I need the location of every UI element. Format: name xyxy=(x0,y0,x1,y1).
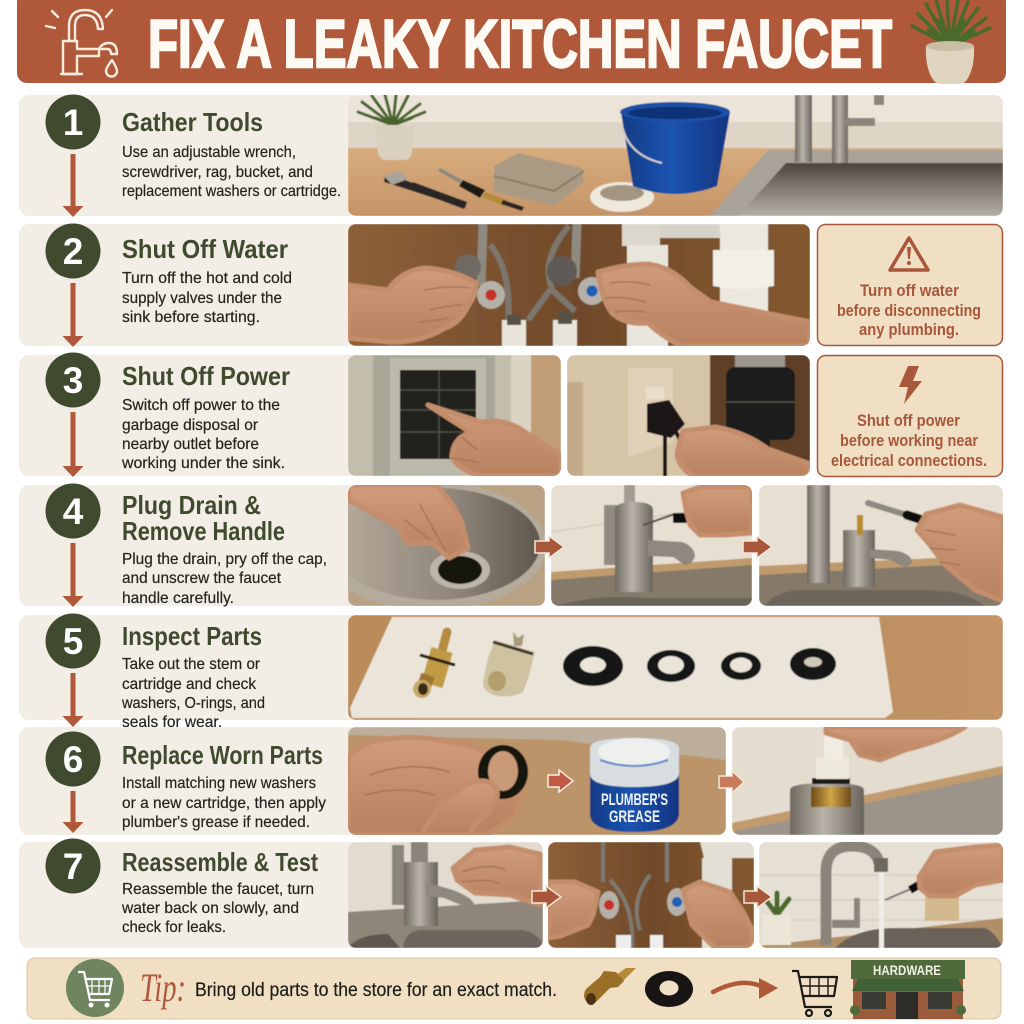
header banner xyxy=(17,0,1006,84)
icon: shopping cart xyxy=(792,971,837,1016)
step 5 text: Take out the stem or xyxy=(122,656,261,673)
photo: reassembling faucet xyxy=(348,842,543,948)
callout text: before working near xyxy=(840,432,979,450)
jar label: GREASE xyxy=(609,807,660,826)
icon: leaking faucet xyxy=(46,10,117,76)
step 2 text xyxy=(122,270,292,326)
tip text: Bring old parts to the store for an exact match. xyxy=(195,980,557,1001)
arrow: 7a to 7b xyxy=(532,886,561,908)
icon: cart badge xyxy=(66,959,124,1017)
step 2 text: sink before starting. xyxy=(122,309,260,326)
step 1 text: replacement washers or cartridge. xyxy=(122,183,341,200)
step 3 text: nearby outlet before xyxy=(122,436,259,453)
callout text: Turn off water xyxy=(860,282,960,300)
step 6 text: or a new cartridge, then apply xyxy=(122,795,326,812)
step 7 number: 7 xyxy=(63,846,83,887)
step 4 text: handle carefully. xyxy=(122,590,234,607)
step 6 number: 6 xyxy=(63,739,83,780)
step 3 text: Switch off power to the xyxy=(122,397,280,414)
arrow: step 1 to 2 xyxy=(62,154,84,217)
photo: handle removed xyxy=(759,485,1003,606)
step 3 text: garbage disposal or xyxy=(122,417,259,434)
icon: lightning bolt xyxy=(899,366,922,404)
step 6 panel xyxy=(19,727,1003,835)
icon: hardware store xyxy=(850,960,966,1019)
callout text: Shut off power xyxy=(857,412,961,430)
step 1 text xyxy=(122,144,341,200)
arrow: 4a to 4b xyxy=(535,536,564,558)
step 7 text: water back on slowly, and xyxy=(121,900,299,917)
step 1 panel xyxy=(19,94,1003,217)
photo: inspected parts on towel xyxy=(348,615,1003,720)
step 6 text: Install matching new washers xyxy=(122,775,316,792)
arrow: step 6 to 7 xyxy=(62,791,84,833)
step 7 heading: Reassemble & Test xyxy=(122,847,318,877)
photo: new washer and grease xyxy=(348,727,726,835)
step 6 heading: Replace Worn Parts xyxy=(122,740,323,770)
step 3 number xyxy=(46,352,100,408)
step 7 number xyxy=(46,838,100,894)
photo: tools on counter xyxy=(348,95,1003,216)
photo: installing cartridge xyxy=(732,727,1003,835)
step 4 number xyxy=(46,484,100,538)
step 1 heading: Gather Tools xyxy=(122,107,263,137)
step 4 heading: Plug Drain & xyxy=(122,490,261,520)
photo: breaker panel xyxy=(348,355,561,476)
step 3 heading: Shut Off Power xyxy=(122,361,290,391)
step 2 number xyxy=(46,224,100,278)
photo: checking for leaks xyxy=(759,842,1003,948)
step 7 text xyxy=(121,881,314,936)
step 7 panel xyxy=(19,838,1003,948)
step 2 panel xyxy=(19,224,1002,347)
step 2 text: supply valves under the xyxy=(122,290,282,307)
jar label xyxy=(602,794,668,822)
step 1 text: screwdriver, rag, bucket, and xyxy=(122,164,313,181)
tip label: Tip: xyxy=(140,965,186,1010)
icon: brass fitting xyxy=(584,968,636,1005)
icon: potted plant xyxy=(912,0,990,84)
step 5 heading: Inspect Parts xyxy=(122,621,262,651)
arrow: step 5 to 6 xyxy=(62,673,84,727)
callout text: before disconnecting xyxy=(837,302,981,320)
step 5 text xyxy=(121,656,265,731)
step 3 text xyxy=(121,397,285,472)
photo: plugging drain xyxy=(348,485,545,606)
step 7 text: Reassemble the faucet, turn xyxy=(122,881,314,898)
photo: supply valves xyxy=(348,224,810,346)
step 6 number xyxy=(46,732,100,786)
arrow: 7b to 7c xyxy=(744,886,772,908)
callout: shut off power xyxy=(818,356,1002,476)
arrow: 4b to 4c xyxy=(743,536,772,558)
step 2 number: 2 xyxy=(63,231,83,272)
step 4 heading xyxy=(122,490,285,546)
step 6 text xyxy=(122,775,326,831)
step 3 number: 3 xyxy=(63,360,83,401)
photo: unplugging disposal xyxy=(567,355,810,477)
callout text xyxy=(837,282,981,339)
store sign: HARDWARE xyxy=(873,962,941,978)
step 1 number: 1 xyxy=(63,102,83,143)
arrow: grease to cartridge xyxy=(719,771,744,793)
step 4 text: Plug the drain, pry off the cap, xyxy=(122,551,327,568)
step 4 number: 4 xyxy=(63,491,84,532)
photo: prying faucet cap xyxy=(551,485,752,606)
step 3 panel xyxy=(19,352,1002,477)
step 4 text: and unscrew the faucet xyxy=(122,570,282,587)
step 5 panel xyxy=(19,614,1003,731)
step 5 number xyxy=(46,614,100,668)
callout text: electrical connections. xyxy=(831,452,987,470)
callout: turn off water xyxy=(818,224,1002,346)
step 2 text: Turn off the hot and cold xyxy=(122,270,292,287)
step 1 text: Use an adjustable wrench, xyxy=(122,144,296,161)
step 2 heading: Shut Off Water xyxy=(122,234,288,264)
icon: black washer xyxy=(645,971,693,1007)
arrow: parts to cart xyxy=(713,978,778,999)
arrow: washer to grease xyxy=(548,770,573,792)
step 5 text: washers, O-rings, and xyxy=(121,695,265,712)
arrow: step 3 to 4 xyxy=(62,412,84,477)
step 5 text: seals for wear. xyxy=(122,714,222,731)
step 3 text: working under the sink. xyxy=(121,455,285,472)
tip banner xyxy=(27,958,1001,1019)
step 5 text: cartridge and check xyxy=(122,676,257,693)
jar label: PLUMBER'S xyxy=(601,790,668,809)
step 4 panel xyxy=(19,482,1003,610)
callout text xyxy=(831,412,987,470)
step 5 number: 5 xyxy=(63,621,83,662)
step 1 number xyxy=(46,94,100,150)
photo: turning water back on xyxy=(548,842,754,948)
step 4 heading: Remove Handle xyxy=(122,516,285,546)
step 4 text xyxy=(122,551,327,607)
step 7 text: check for leaks. xyxy=(122,919,226,936)
icon: warning triangle xyxy=(890,238,928,270)
step 6 text: plumber's grease if needed. xyxy=(122,814,310,831)
arrow: step 4 to 5 xyxy=(62,543,84,607)
arrow: step 2 to 3 xyxy=(62,283,84,347)
callout text: any plumbing. xyxy=(859,321,959,339)
